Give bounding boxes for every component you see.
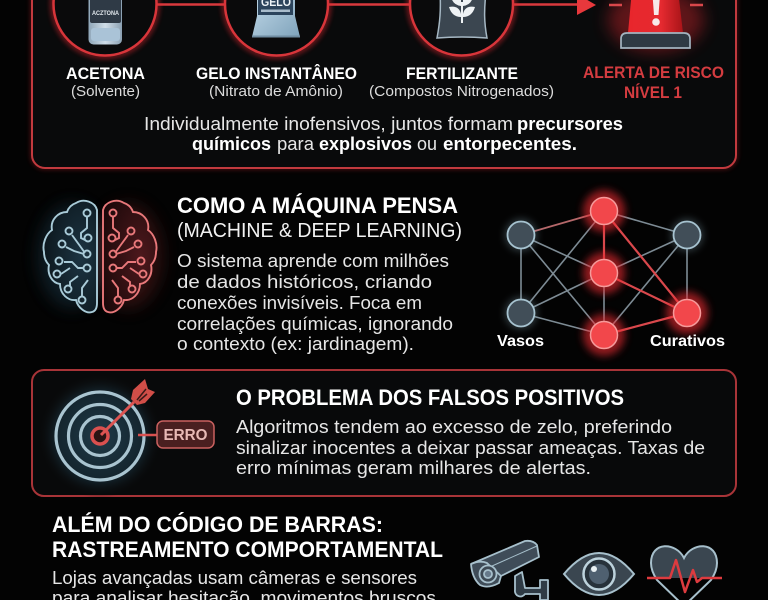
- label: curativos: Curativos: [650, 333, 725, 350]
- heading: false positives: O PROBLEMA DOS FALSOS POSITIVOS: [236, 385, 624, 410]
- icon: brain: [38, 201, 162, 312]
- heading: behavioural tracking: RASTREAMENTO COMPORTAMENTAL: [52, 537, 443, 562]
- text block: behavioural tracking explanation: Lojas avançadas usam câmeras e sensores: [52, 567, 417, 588]
- text block: precursors summary: Individualmente inofensivos, juntos formam: [144, 113, 513, 134]
- label: acetona: [66, 64, 145, 100]
- text block: precursors summary: químicos: [192, 133, 271, 154]
- network blue nodes: [505, 219, 703, 329]
- label: fertilizante: FERTILIZANTE: [406, 64, 518, 83]
- text block: precursors summary: [144, 113, 623, 154]
- label: risk alert: [583, 63, 724, 102]
- text block: machine learning explanation: de dados históricos, criando: [177, 271, 432, 292]
- text block: precursors summary: para: [277, 133, 315, 154]
- label: acetona: (Solvente): [71, 83, 140, 100]
- label: fertilizante: (Compostos Nitrogenados): [369, 83, 554, 100]
- text block: machine learning explanation: [177, 250, 453, 354]
- icon: acetone bottle: ACZTONA: [92, 11, 120, 17]
- label: vasos: Vasos: [497, 333, 544, 350]
- icon: heart with pulse: [647, 546, 722, 600]
- text block: precursors summary: explosivos: [319, 133, 412, 154]
- text block: precursors summary: ou: [417, 133, 437, 154]
- icon: security camera: [471, 541, 548, 600]
- text block: machine learning explanation: O sistema aprende com milhões: [177, 250, 449, 271]
- text block: false positives explanation: sinalizar inocentes a deixar passar ameaças. Taxas de: [236, 437, 705, 458]
- label: risk alert: ALERTA DE RISCO: [583, 63, 724, 82]
- callout: erro tag: [138, 421, 214, 448]
- chart: neural network: [497, 190, 725, 356]
- icon: acetone bottle: [53, 0, 157, 56]
- network red nodes: [583, 190, 708, 356]
- text block: machine learning explanation: conexões invisíveis. Foca em: [177, 292, 422, 313]
- heading: machine thinking: COMO A MÁQUINA PENSA: [177, 193, 458, 218]
- icon: instant ice pack: [224, 0, 328, 56]
- icon: eye: [564, 553, 634, 595]
- heading: behavioural tracking: [52, 512, 443, 562]
- icon: fertilizer bag: [410, 0, 514, 56]
- text block: false positives explanation: Algoritmos tendem ao excesso de zelo, preferindo: [236, 416, 672, 437]
- text block: false positives explanation: erro mínimas geram milhares de alertas.: [236, 457, 591, 478]
- label: gelo instantaneo: [196, 64, 357, 100]
- label: gelo instantaneo: (Nitrato de Amônio): [209, 83, 343, 100]
- icon: target with arrow: [38, 374, 162, 498]
- panel: false positives: [32, 370, 736, 498]
- label: acetona: ACETONA: [66, 64, 145, 83]
- brain left hemisphere: [43, 201, 97, 312]
- heading: behavioural tracking: ALÉM DO CÓDIGO DE BARRAS:: [52, 512, 383, 537]
- brain right hemisphere: [103, 201, 157, 312]
- label: gelo instantaneo: GELO INSTANTÂNEO: [196, 64, 357, 83]
- text block: precursors summary: precursores: [517, 113, 623, 134]
- connector lines and arrow: [157, 0, 596, 15]
- text block: machine learning explanation: o contexto (ex: jardinagem).: [177, 333, 414, 354]
- label: fertilizante: [369, 64, 554, 100]
- heading: machine thinking: (MACHINE & DEEP LEARNING): [177, 220, 462, 242]
- icon: red alert siren: [608, 0, 704, 52]
- text block: behavioural tracking explanation: [52, 567, 436, 600]
- callout: erro tag: ERRO: [164, 427, 208, 444]
- heading: machine thinking: [177, 193, 462, 242]
- panel: chemical combination: [32, 0, 736, 168]
- label: risk alert: NÍVEL 1: [624, 83, 682, 102]
- text block: precursors summary: entorpecentes.: [443, 133, 577, 154]
- text block: machine learning explanation: correlações químicas, ignorando: [177, 313, 453, 334]
- text block: false positives explanation: [236, 416, 705, 478]
